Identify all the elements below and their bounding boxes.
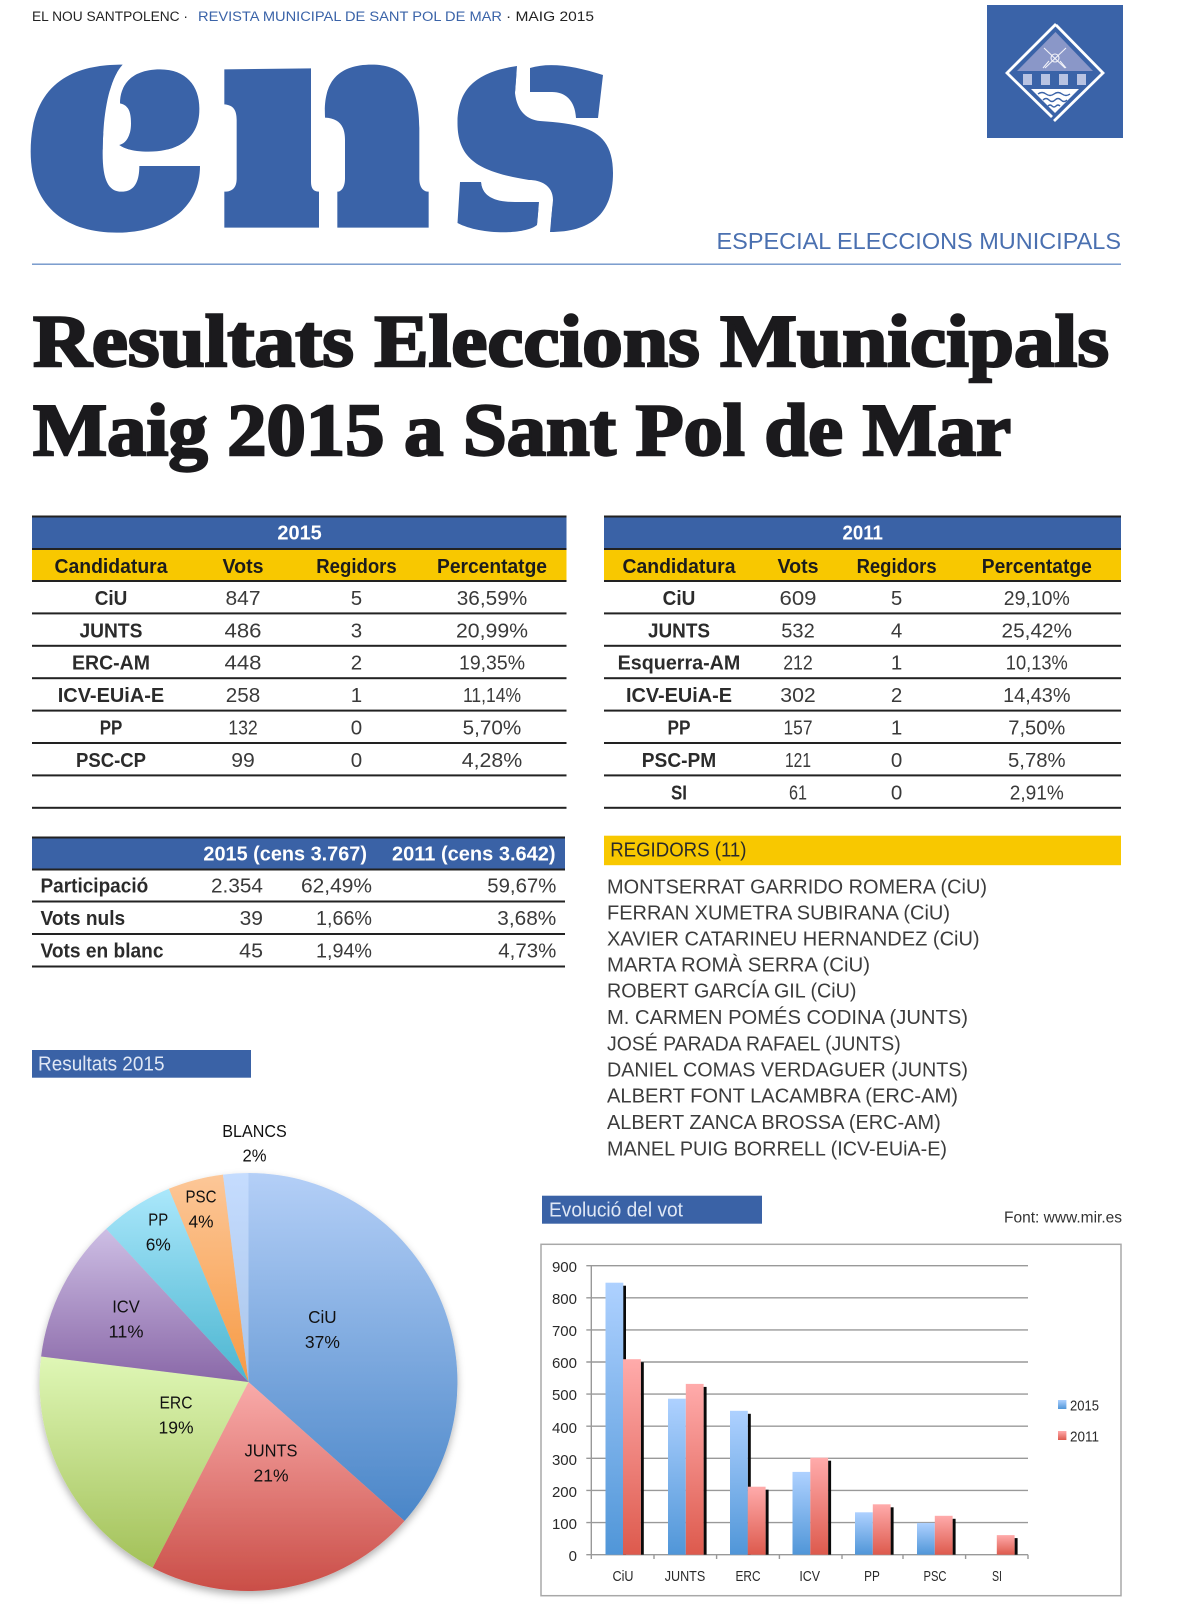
pie labels: 4% (188, 1212, 214, 1232)
x axis labels (612, 1569, 1002, 1585)
row: PP: 7,50% (1008, 716, 1065, 739)
row: Participació: Participació (40, 875, 148, 898)
row: ICV-EUiA-E (58, 684, 521, 707)
row: CiU: CiU (95, 587, 127, 610)
x axis labels: CiU (612, 1569, 634, 1585)
row: Participació: 2.354 (211, 875, 263, 898)
row: ICV-EUiA-E: 258 (226, 684, 260, 707)
y axis labels: 800 (552, 1291, 577, 1308)
row: JUNTS: 25,42% (1002, 619, 1072, 642)
pie chart (40, 1121, 457, 1591)
names: DANIEL COMAS VERDAGUER (JUNTS) (607, 1058, 968, 1082)
row: PP: PP (100, 716, 122, 739)
row: Vots nuls: 1,66% (316, 907, 372, 930)
participation header: 2015 (cens 3.767) (203, 843, 367, 866)
row: Vots nuls: 39 (240, 907, 263, 930)
y axis labels: 100 (552, 1516, 577, 1533)
heading: Resultats 2015: Resultats 2015 (38, 1054, 164, 1076)
row: JUNTS (648, 619, 1072, 642)
y axis labels: 300 (552, 1452, 577, 1469)
row: JUNTS: 486 (224, 619, 262, 642)
row: PSC-CP (76, 749, 522, 772)
pie labels: 2% (242, 1146, 266, 1166)
pie labels: ICV (112, 1296, 140, 1316)
title (33, 301, 1109, 472)
row: Participació: 62,49% (301, 875, 372, 898)
pie labels: BLANCS (222, 1121, 287, 1141)
row: ERC-AM: ERC-AM (72, 652, 150, 675)
header row: Candidatura (54, 555, 168, 578)
x axis labels: ICV (799, 1569, 820, 1585)
row: CiU: 29,10% (1004, 587, 1070, 610)
row: ERC-AM: 19,35% (459, 652, 525, 675)
pie labels: CiU (308, 1307, 337, 1327)
y axis labels: 200 (552, 1484, 577, 1501)
participation header (203, 843, 556, 866)
row: SI: 0 (891, 781, 902, 804)
bar chart (541, 1244, 1121, 1596)
pie labels: PSC (186, 1186, 216, 1206)
panel: regidors list (604, 836, 1121, 1160)
heading: Evolució del vot: Evolució del vot (549, 1200, 683, 1222)
row: CiU: 847 (226, 587, 260, 610)
header row: Vots (778, 555, 818, 578)
row: ICV-EUiA-E: 11,14% (463, 684, 521, 707)
bar shadows (623, 1286, 1018, 1555)
row: ERC-AM: 2 (351, 652, 362, 675)
pie labels: 21% (254, 1466, 288, 1486)
table: 2015 results: 2015 (277, 522, 322, 545)
header row (622, 555, 1092, 578)
row: SI: 2,91% (1010, 781, 1064, 804)
y axis labels: 700 (552, 1323, 577, 1340)
row: Participació (40, 875, 556, 898)
y axis labels: 500 (552, 1387, 577, 1404)
x axis labels: SI (992, 1569, 1002, 1585)
row: CiU: 36,59% (457, 587, 527, 610)
row: Vots en blanc (40, 940, 556, 963)
row: PP: 1 (891, 716, 902, 739)
bars: 2015 (606, 1283, 935, 1555)
legend: 2011 (1070, 1430, 1099, 1446)
header row: Candidatura (622, 555, 736, 578)
x axis labels: PSC (924, 1569, 946, 1585)
row: SI (671, 781, 1064, 804)
row: PSC-CP: 4,28% (462, 749, 522, 772)
row: PP: 157 (784, 716, 812, 739)
row: PSC-CP: 0 (351, 749, 362, 772)
row: Vots en blanc: Vots en blanc (40, 940, 164, 963)
row: JUNTS: 3 (351, 619, 362, 642)
names (607, 876, 987, 1160)
row: CiU: 609 (780, 587, 816, 610)
heading: Evolució del vot (542, 1196, 762, 1224)
y axis labels: 900 (552, 1259, 577, 1276)
header row (54, 555, 547, 578)
table: 2011 results: 2011 (842, 522, 883, 545)
y axis labels: 600 (552, 1355, 577, 1372)
row: JUNTS (80, 619, 528, 642)
y axis labels (552, 1259, 577, 1565)
names: MANEL PUIG BORRELL (ICV-EUiA-E) (607, 1137, 947, 1160)
row: CiU: CiU (663, 587, 695, 610)
table: participation (32, 836, 565, 968)
row: CiU: 5 (891, 587, 902, 610)
row: PP: 0 (351, 716, 362, 739)
table: 2011 results (604, 516, 1121, 809)
names: XAVIER CATARINEU HERNANDEZ (CiU) (607, 928, 980, 950)
names: M. CARMEN POMÉS CODINA (JUNTS) (607, 1006, 968, 1029)
pie labels: ERC (160, 1392, 192, 1412)
header row: Percentatge (437, 555, 547, 578)
row: Vots nuls: 3,68% (497, 907, 556, 930)
row: JUNTS: JUNTS (648, 619, 710, 642)
masthead line: EL NOU SANTPOLENC · (32, 9, 188, 24)
row: ICV-EUiA-E: ICV-EUiA-E (58, 684, 164, 707)
row: ICV-EUiA-E: 1 (351, 684, 362, 707)
pie labels (108, 1121, 340, 1486)
row: ICV-EUiA-E: 302 (780, 684, 816, 707)
pie labels: 37% (305, 1332, 340, 1352)
header row: Vots (222, 555, 264, 578)
pie labels: 19% (158, 1418, 194, 1438)
row: Vots en blanc: 45 (239, 940, 263, 963)
row: PSC-PM: PSC-PM (642, 749, 716, 772)
row: Vots nuls (40, 907, 556, 930)
legend: 2015 (1070, 1399, 1099, 1415)
header row: Percentatge (982, 555, 1092, 578)
row: JUNTS: 20,99% (456, 619, 528, 642)
row: Esquerra-AM: 212 (783, 652, 813, 675)
row: CiU (95, 587, 527, 610)
row: ICV-EUiA-E: 14,43% (1003, 684, 1071, 707)
row: Vots en blanc: 4,73% (498, 940, 556, 963)
row: PSC-PM: 0 (891, 749, 902, 772)
names: JOSÉ PARADA RAFAEL (JUNTS) (607, 1032, 901, 1055)
participation header: 2011 (cens 3.642) (392, 843, 556, 866)
names: ROBERT GARCÍA GIL (CiU) (607, 980, 856, 1003)
row: Esquerra-AM: Esquerra-AM (618, 652, 740, 675)
row: SI: 61 (789, 781, 807, 804)
wordmark (30, 64, 613, 233)
row: Esquerra-AM: 10,13% (1006, 652, 1068, 675)
row: Vots en blanc: 1,94% (316, 940, 372, 963)
bars: 2011 (623, 1359, 1015, 1555)
row: PSC-PM (642, 749, 1066, 772)
special edition label: ESPECIAL ELECCIONS MUNICIPALS (716, 228, 1121, 254)
row: ICV-EUiA-E (626, 684, 1071, 707)
row: ERC-AM (72, 652, 525, 675)
row: CiU: 5 (351, 587, 362, 610)
row: PSC-PM: 121 (785, 749, 811, 772)
row: Esquerra-AM: 1 (891, 652, 902, 675)
row: PSC-CP: 99 (231, 749, 255, 772)
header row: Regidors (316, 555, 397, 578)
row: PP (100, 716, 521, 739)
x axis labels: JUNTS (665, 1569, 705, 1585)
row: PP: 5,70% (463, 716, 521, 739)
row: ICV-EUiA-E: 2 (891, 684, 902, 707)
names: ALBERT FONT LACAMBRA (ERC-AM) (607, 1085, 958, 1108)
row: ERC-AM: 448 (224, 652, 262, 675)
masthead line (32, 9, 594, 24)
masthead line: · MAIG 2015 (506, 9, 594, 24)
source note: Font: www.mir.es (1004, 1210, 1122, 1227)
row: ICV-EUiA-E: ICV-EUiA-E (626, 684, 732, 707)
row: PP: PP (668, 716, 690, 739)
regidors heading: REGIDORS (11) (610, 839, 746, 862)
row: Vots nuls: Vots nuls (40, 907, 125, 930)
row: JUNTS: 4 (891, 619, 902, 642)
logo badge (987, 5, 1123, 138)
row: PP: 132 (228, 716, 258, 739)
row: PSC-PM: 5,78% (1008, 749, 1066, 772)
row: Participació: 59,67% (487, 875, 556, 898)
heading: Resultats 2015 (32, 1050, 251, 1078)
header row: Regidors (857, 555, 937, 578)
pie labels: 11% (108, 1322, 144, 1342)
names: MARTA ROMÀ SERRA (CiU) (607, 954, 870, 977)
names: MONTSERRAT GARRIDO ROMERA (CiU) (607, 876, 987, 898)
pie labels: 6% (146, 1234, 171, 1254)
title: Resultats Eleccions Municipals (33, 301, 1109, 383)
row: Esquerra-AM (618, 652, 1068, 675)
row: JUNTS: JUNTS (80, 619, 142, 642)
table: 2015 results (32, 516, 566, 809)
title: Maig 2015 a Sant Pol de Mar (33, 390, 1011, 472)
names: ALBERT ZANCA BROSSA (ERC-AM) (607, 1111, 941, 1134)
masthead line: REVISTA MUNICIPAL DE SANT POL DE MAR (198, 9, 502, 24)
row: CiU (663, 587, 1070, 610)
names: FERRAN XUMETRA SUBIRANA (CiU) (607, 902, 950, 925)
y axis labels: 0 (569, 1548, 577, 1565)
y axis labels: 400 (552, 1420, 577, 1437)
row: SI: SI (671, 781, 687, 804)
row: PSC-CP: PSC-CP (76, 749, 146, 772)
pie labels: PP (148, 1210, 168, 1230)
x axis labels: ERC (736, 1569, 760, 1585)
pie labels: JUNTS (244, 1440, 298, 1460)
x axis labels: PP (864, 1569, 880, 1585)
row: JUNTS: 532 (781, 619, 815, 642)
legend (1058, 1399, 1099, 1446)
row: PP (668, 716, 1065, 739)
